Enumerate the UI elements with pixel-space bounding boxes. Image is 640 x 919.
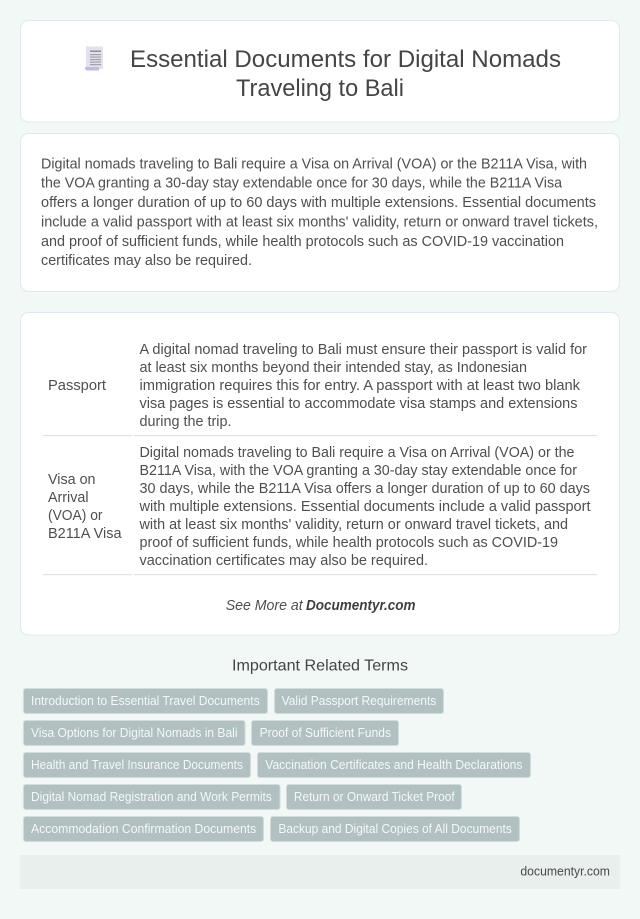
- table row: Passport: immigration requires this for entry. A passport with at least two blank: [140, 378, 581, 394]
- heading: related terms: Important Related Terms: [232, 658, 408, 675]
- tag: Digital Nomad Registration and Work Permits: [31, 790, 272, 804]
- table row: Visa on Arrival: Arrival: [48, 490, 88, 506]
- tag: Health and Travel Insurance Documents: [31, 758, 243, 772]
- tag: [252, 720, 398, 746]
- table row: Visa on Arrival: [48, 445, 590, 569]
- related terms tags: [24, 688, 530, 842]
- tag: Valid Passport Requirements: [282, 694, 436, 708]
- footer bar: [20, 855, 620, 889]
- panel: summary: [20, 134, 620, 292]
- table row: Passport: during the trip.: [140, 414, 232, 430]
- table row: Passport: visa pages is essential to accommodate visa stamps and extensions: [140, 396, 578, 412]
- table row: Visa on Arrival: Visa on: [48, 472, 96, 488]
- footer bar: documentyr.com: [520, 863, 610, 878]
- table row: Passport: [48, 342, 587, 430]
- table row: Visa on Arrival: with multiple extensions. Essential documents include a valid passport: [138, 499, 591, 515]
- see more link: See More at: [226, 598, 304, 614]
- summary paragraph: the VOA granting a 30-day stay extendable once for 30 days, while the B211A Visa: [41, 176, 562, 192]
- table row: Visa on Arrival: (VOA) or: [48, 508, 103, 524]
- summary paragraph: offers a longer duration of up to 60 days with multiple extensions. Essential documents: [41, 195, 596, 211]
- tag: [270, 816, 520, 842]
- tag: Proof of Sufficient Funds: [260, 726, 391, 740]
- tag: Vaccination Certificates and Health Declarations: [265, 758, 522, 772]
- summary paragraph: include a valid passport with at least six months' validity, return or onward travel tickets,: [41, 214, 598, 230]
- summary paragraph: and proof of sufficient funds, while health protocols such as COVID-19 vaccination: [41, 234, 564, 250]
- see more link: [226, 598, 416, 614]
- tag: [258, 752, 530, 778]
- tag: [24, 784, 280, 810]
- summary paragraph: [41, 156, 598, 269]
- table row: Visa on Arrival: proof of sufficient funds, while health protocols such as COVID-19: [140, 535, 558, 551]
- tag: [274, 688, 444, 714]
- table row: Visa on Arrival: B211A Visa, with the VOA granting a 30-day stay extendable once for: [140, 463, 577, 479]
- tag: [24, 752, 250, 778]
- table row: Visa on Arrival: vaccination certificates may also be required.: [140, 553, 428, 569]
- tag: [24, 688, 268, 714]
- see more link: Documentyr.com: [306, 598, 416, 614]
- tag: Backup and Digital Copies of All Documents: [278, 822, 512, 836]
- tag: [24, 816, 264, 842]
- title: Essential Documents for Digital Nomads: [130, 46, 561, 73]
- tag: [286, 784, 462, 810]
- icon: document scroll: [85, 46, 103, 70]
- table row: Passport: Passport: [48, 378, 106, 394]
- summary paragraph: certificates may also be required.: [41, 253, 252, 269]
- table row: Passport: at least six months beyond their intended stay, as Indonesian: [140, 360, 527, 376]
- tag: [24, 720, 245, 746]
- title: [130, 46, 561, 102]
- panel: documents table: [20, 312, 620, 635]
- table row: Visa on Arrival: B211A Visa: [48, 526, 122, 542]
- tag: Introduction to Essential Travel Documents: [31, 694, 260, 708]
- tag: Accommodation Confirmation Documents: [31, 822, 256, 836]
- tag: Visa Options for Digital Nomads in Bali: [31, 726, 238, 740]
- table row: Visa on Arrival: Digital nomads traveling to Bali require a Visa on Arrival (VOA) or the: [140, 445, 574, 461]
- table row: Passport: A digital nomad traveling to Bali must ensure their passport is valid for: [140, 342, 587, 358]
- tag: Return or Onward Ticket Proof: [294, 790, 455, 804]
- panel: title card: [20, 20, 620, 122]
- table row: Visa on Arrival: with at least six months' validity, return or onward travel tickets, and: [138, 517, 568, 533]
- title: Traveling to Bali: [236, 75, 404, 102]
- table row: Visa on Arrival: 30 days, while the B211A Visa offers a longer duration of up to 60 days: [140, 481, 590, 497]
- summary paragraph: Digital nomads traveling to Bali require a Visa on Arrival (VOA) or the B211A Visa, with: [41, 156, 587, 172]
